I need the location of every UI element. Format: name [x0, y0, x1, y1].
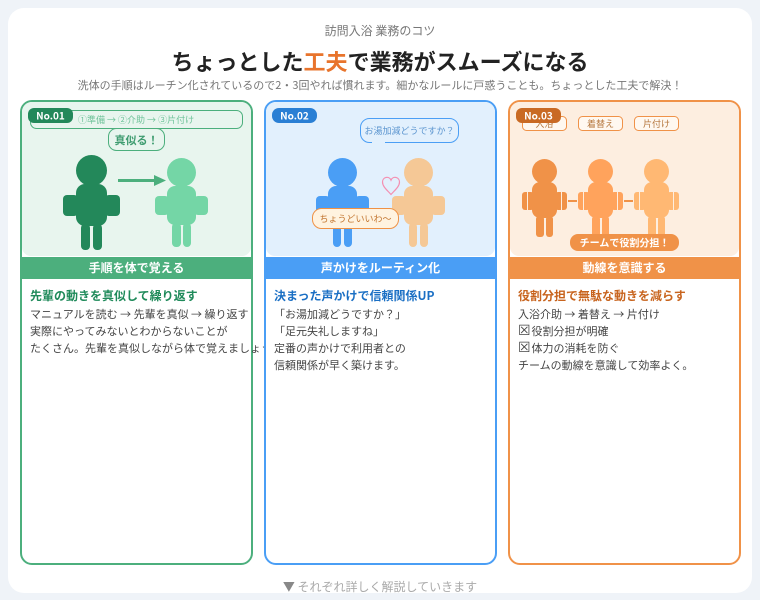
text block [518, 287, 693, 373]
text block: 「足元失礼しますね」 [274, 323, 384, 339]
header bar: 動線を意識する [582, 259, 666, 276]
panel: card 1 手順を体で覚える [20, 100, 253, 565]
text block: 実際にやってみないとわからないことが [30, 323, 227, 339]
header bar: 声かけをルーティン化 [321, 259, 440, 276]
header bar [264, 257, 497, 279]
header bar: 手順を体で覚える [89, 259, 184, 276]
text block: 「お湯加減どうですか？」 [274, 306, 406, 322]
illustration: staff and user with speech bubbles: お湯加減どうですか？ [364, 124, 455, 137]
illustration: three staff in a line: No.03 [524, 108, 553, 122]
text block: 体力の消耗を防ぐ [531, 340, 619, 356]
panel: card 2 声かけをルーティン化 [264, 100, 497, 565]
header bar [508, 257, 741, 279]
text block: マニュアルを読む → 先輩を真似 → 繰り返す [30, 306, 249, 322]
text block: 入浴介助 → 着替え → 片付け [518, 306, 660, 322]
illustration: senior and trainee figures: ①準備 → ②介助 → ③片付け [78, 113, 194, 126]
text block: 決まった声かけで信頼関係UP [274, 287, 435, 304]
illustration: senior and trainee figures: No.01 [36, 108, 65, 122]
illustration: staff and user with speech bubbles: ちょうどいいわ〜 [319, 212, 392, 225]
panel: card 3 動線を意識する [508, 100, 741, 565]
illustration: three staff in a line: 入浴 [535, 117, 554, 130]
illustration: three staff in a line [510, 102, 739, 256]
eyebrow heading: 訪問入浴 業務のコツ [325, 22, 435, 39]
illustration: three staff in a line: 着替え [587, 117, 614, 130]
text block [274, 287, 435, 373]
footer note: ▼ それぞれ詳しく解説していきます [283, 578, 477, 595]
header bar [20, 257, 253, 279]
text block: 信頼関係が早く築けます。 [274, 357, 405, 373]
illustration: senior and trainee figures: 真似る！ [114, 132, 158, 148]
illustration: three staff in a line: チームで役割分担！ [580, 234, 669, 250]
title: ちょっとした工夫で業務がスムーズになる [172, 45, 588, 77]
text block: チームの動線を意識して効率よく。 [518, 357, 693, 373]
text block: 定番の声かけで利用者との [274, 340, 406, 356]
text block: 先輩の動きを真似して繰り返す [30, 287, 198, 304]
text block: たくさん。先輩を真似しながら体で覚えましょう。 [30, 340, 282, 356]
text block: ☒ [518, 337, 531, 357]
illustration: staff and user with speech bubbles [266, 102, 495, 256]
text block [30, 287, 282, 356]
text block: 役割分担で無駄な動きを減らす [518, 287, 686, 304]
illustration: staff and user with speech bubbles: No.02 [280, 108, 309, 122]
illustration: three staff in a line: 片付け [643, 117, 670, 130]
subtitle: 洗体の手順はルーチン化されているので2・3回やれば慣れます。細かなルールに戸惑うことも。ちょっとした工夫で解決！ [78, 77, 682, 93]
text block: ☒ [518, 320, 531, 340]
text block: 役割分担が明確 [531, 323, 608, 339]
illustration: senior and trainee figures [22, 102, 251, 256]
